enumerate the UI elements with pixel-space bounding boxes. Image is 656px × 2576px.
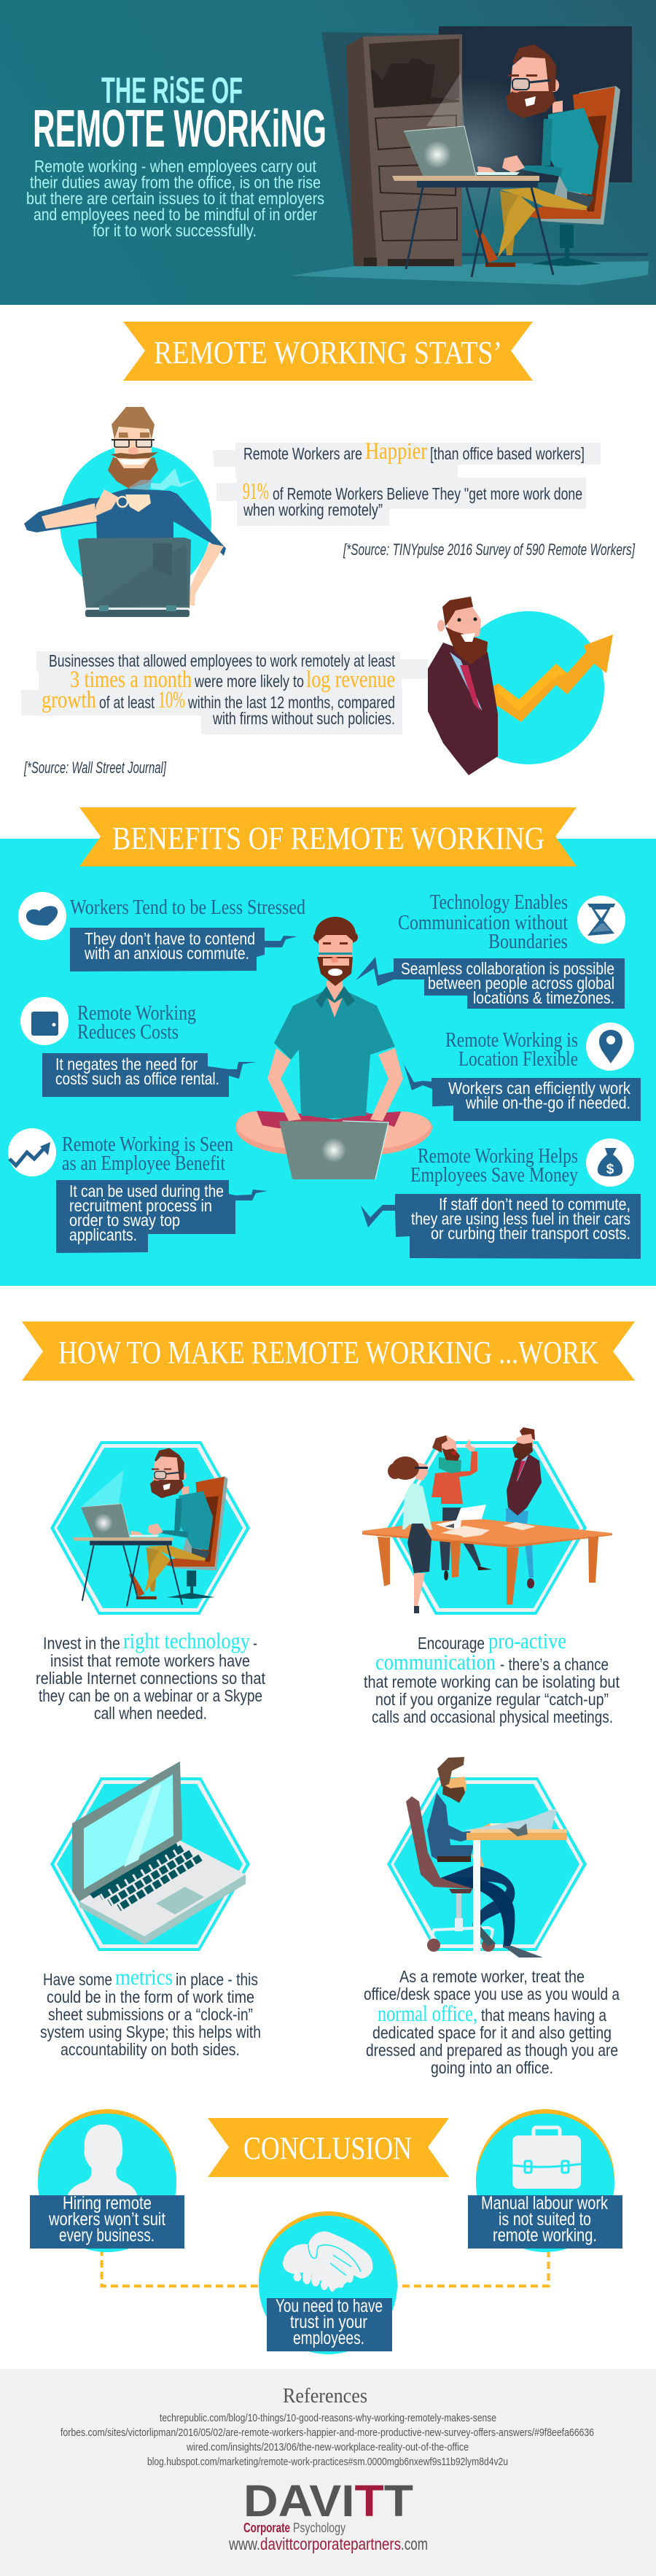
tip: right technology: reliable Internet connections so that: [36, 1669, 266, 1688]
benefit: communication without boundaries: between people across global: [428, 974, 614, 993]
icon: map pin: [586, 1023, 634, 1071]
conclusion: manual labour: is not suited to: [499, 2209, 591, 2230]
intro paragraph: their duties away from the office, is on the rise: [30, 173, 321, 192]
icon: money bag: [586, 1138, 634, 1187]
intro paragraph: [26, 157, 324, 240]
heading banner: conclusion: [208, 2118, 449, 2177]
icon: wallet: [20, 997, 69, 1045]
benefit: location flexible: while on-the-go if needed.: [465, 1093, 630, 1112]
benefit: less stressed: Workers Tend to be Less Stressed: [70, 896, 305, 919]
stat text: log revenue growth: 10%: [158, 687, 185, 713]
tip: right technology: -: [253, 1634, 257, 1653]
stat text: happier remote workers: Remote Workers are: [243, 444, 362, 463]
benefit: save money: or curbing their transport costs.: [431, 1224, 630, 1243]
benefit: location flexible: Remote Working is: [445, 1028, 578, 1052]
conclusion: trust: employees.: [293, 2328, 364, 2348]
conclusion: hiring: [30, 2109, 184, 2252]
heading banner: how to make remote working work: [22, 1322, 635, 1381]
icon: person silhouette: [67, 2125, 138, 2197]
benefit: location flexible: Workers can efficiently work: [448, 1079, 630, 1098]
conclusion: manual labour: remote working.: [493, 2225, 597, 2246]
tip: normal office: dedicated space for it and also getting: [372, 2023, 612, 2042]
logo: Davitt Corporate Psychology: Psychology: [293, 2521, 345, 2535]
benefit: reduces costs: Reduces Costs: [77, 1020, 179, 1044]
references list: [60, 2412, 594, 2468]
tip: pro-active communication: calls and occasional physical meetings.: [372, 1707, 613, 1726]
benefit: employee benefit: applicants.: [69, 1225, 137, 1244]
heading banner: remote working stats: REMOTE WORKING STATS’: [154, 335, 502, 371]
panel: conclusion: [30, 2109, 622, 2354]
benefit: location flexible: Location Flexible: [458, 1047, 578, 1071]
tip: pro-active communication: not if you organize regular “catch-up”: [375, 1690, 609, 1709]
stat text: happier remote workers: [than office based workers]: [430, 444, 585, 463]
hexagon with profile worker at desk: [387, 1757, 587, 1958]
benefit: employee benefit: Remote Working is Seen: [62, 1133, 233, 1156]
conclusion: trust: [259, 2211, 397, 2354]
hexagon with laptop: [50, 1761, 250, 1951]
tip: metrics: [40, 1761, 261, 2059]
benefit: less stressed: They don’t have to contend: [85, 929, 255, 948]
tip: pro-active communication: that remote working can be isolating but: [364, 1672, 620, 1691]
conclusion: trust: trust in your: [290, 2312, 367, 2332]
benefit: employee benefit: as an Employee Benefit: [62, 1152, 225, 1175]
benefit: reduces costs: [20, 997, 257, 1097]
tip: metrics: metrics: [115, 1964, 173, 1990]
stat text: happier remote workers: Happier: [365, 438, 427, 465]
tip: metrics: sheet submissions or a “clock-in”: [48, 2005, 253, 2024]
title: [33, 70, 327, 158]
stat text: log revenue growth: were more likely to: [194, 672, 304, 691]
tip: right technology: they can be on a webinar or a Skype: [39, 1686, 262, 1705]
benefit: communication without boundaries: Boundaries: [488, 930, 568, 953]
heading banner: remote working stats: [123, 322, 533, 381]
hero illustration: office with remote worker: [290, 26, 649, 285]
benefit: location flexible: [404, 1023, 641, 1121]
stat text: log revenue growth: with firms without such policies.: [212, 709, 395, 728]
stat text: log revenue growth: 3 times a month: [70, 667, 192, 693]
tip: right technology: call when needed.: [94, 1704, 207, 1723]
stat text: log revenue growth: of at least: [99, 693, 155, 712]
benefit: reduces costs: costs such as office rental.: [55, 1069, 219, 1088]
illustration: man with coffee and laptop: [24, 407, 226, 617]
source note: Wall Street Journal: [*Source: Wall Street Journal]: [23, 759, 167, 777]
conclusion: trust: You need to have: [276, 2296, 383, 2316]
tip: metrics: system using Skype; this helps with: [40, 2022, 261, 2041]
icon: heart: [18, 892, 66, 940]
illustration: businessman with growth arrow: [428, 597, 613, 775]
benefit: reduces costs: Remote Working: [77, 1001, 196, 1025]
conclusion: hiring: every business.: [59, 2225, 155, 2246]
panel: references and footer: [0, 2369, 656, 2576]
stat text: happier remote workers: when working remotely”: [243, 500, 383, 519]
tip: metrics: could be in the form of work time: [47, 1987, 254, 2006]
logo: Davitt Corporate Psychology: DAVITT: [243, 2476, 413, 2526]
intro paragraph: and employees need to be mindful of in order: [34, 205, 317, 224]
benefit: less stressed: with an anxious commute.: [84, 944, 249, 963]
intro paragraph: Remote working - when employees carry out: [34, 157, 317, 176]
intro paragraph: for it to work successfully.: [93, 221, 257, 240]
tip: pro-active communication: [362, 1427, 620, 1726]
conclusion: hiring: Hiring remote: [63, 2193, 152, 2214]
tip: normal office: [364, 1757, 620, 2077]
panel: benefits: [0, 807, 656, 1286]
benefit: employee benefit: It can be used during the: [69, 1182, 224, 1200]
conclusion: hiring: workers won’t suit: [48, 2209, 165, 2230]
website url: davittcorporatepartners: [260, 2534, 401, 2553]
benefit: less stressed: [18, 892, 305, 971]
panel: hero: [0, 0, 656, 305]
tip: normal office: going into an office.: [431, 2058, 553, 2077]
tip: right technology: insist that remote workers have: [50, 1651, 250, 1670]
tip: normal office: As a remote worker, treat the: [399, 1967, 585, 1986]
icon: trending arrow: [8, 1128, 56, 1176]
title: REMOTE WORKiNG: [33, 100, 327, 158]
benefit: communication without boundaries: [356, 891, 625, 1009]
tip: pro-active communication: Encourage: [418, 1634, 485, 1653]
conclusion: manual labour: [468, 2109, 622, 2252]
benefit: communication without boundaries: Seamless collaboration is possible: [401, 959, 614, 978]
connector: dashed lines: [102, 2249, 548, 2286]
benefit: save money: Employees Save Money: [410, 1163, 578, 1187]
benefit: communication without boundaries: Communication without: [398, 911, 568, 934]
stat text: log revenue growth: log revenue: [306, 667, 395, 693]
heading banner: benefits: BENEFITS OF REMOTE WORKING: [112, 820, 544, 856]
tip: right technology: Invest in the: [43, 1634, 120, 1653]
benefit: employee benefit: [8, 1128, 268, 1253]
logo: Davitt Corporate Psychology: Corporate: [243, 2521, 290, 2535]
stat text: log revenue growth: within the last 12 months, compared: [187, 693, 395, 712]
website url: .com: [401, 2534, 428, 2553]
benefit: save money: [361, 1138, 641, 1259]
benefit: employee benefit: order to sway top: [69, 1211, 180, 1230]
hexagon with team around table: [362, 1427, 612, 1615]
benefit: communication without boundaries: locations & timezones.: [473, 988, 614, 1007]
tip: metrics: accountability on both sides.: [60, 2040, 240, 2059]
heading banner: conclusion: CONCLUSION: [243, 2130, 412, 2166]
benefit: employee benefit: recruitment process in: [69, 1196, 212, 1215]
hexagon with desk worker: [50, 1441, 250, 1615]
benefit: reduces costs: It negates the need for: [55, 1055, 198, 1074]
stat text: happier remote workers: [213, 438, 601, 526]
tip: metrics: Have some: [43, 1970, 112, 1989]
tip: normal office: normal office,: [378, 2001, 477, 2026]
icon: hourglass: [577, 896, 625, 944]
tip: pro-active communication: - there’s a chance: [500, 1655, 609, 1674]
tip: pro-active communication: pro-active: [488, 1628, 566, 1653]
stat text: log revenue growth: [21, 651, 428, 734]
stat text: log revenue growth: growth: [42, 687, 96, 713]
tip: normal office: that means having a: [481, 2006, 606, 2025]
tip: metrics: in place - this: [176, 1970, 258, 1989]
heading banner: benefits: [79, 807, 577, 866]
icon: handshake: [283, 2232, 372, 2292]
stat text: happier remote workers: 91%: [243, 478, 269, 505]
references list: wired.com/insights/2013/06/the-new-workplace-reality-out-of-the-office: [186, 2441, 469, 2453]
title: THE RiSE OF: [101, 70, 243, 111]
tip: right technology: [36, 1441, 266, 1723]
intro paragraph: but there are certain issues to it that employers: [26, 189, 324, 208]
website url: www.: [228, 2534, 260, 2553]
tip: right technology: right technology: [123, 1628, 250, 1653]
conclusion: manual labour: Manual labour work: [481, 2193, 608, 2214]
references list: blog.hubspot.com/marketing/remote-work-practices#sm.0000mgb6nxewf9s11b92lym8d4v2u: [147, 2456, 508, 2468]
icon: money bag: $: [606, 1162, 614, 1177]
illustration: man cross-legged with laptop: [235, 917, 432, 1179]
benefit: save money: Remote Working Helps: [418, 1144, 578, 1168]
icon: briefcase: [512, 2127, 581, 2189]
stat text: log revenue growth: Businesses that allowed employees to work remotely at least: [49, 651, 395, 670]
tip: pro-active communication: communication: [375, 1649, 496, 1675]
references list: techrepublic.com/blog/10-things/10-good-reasons-why-working-remotely-makes-sense: [160, 2412, 496, 2424]
references heading: References: [283, 2384, 367, 2408]
benefit: communication without boundaries: Technology Enables: [430, 891, 568, 914]
